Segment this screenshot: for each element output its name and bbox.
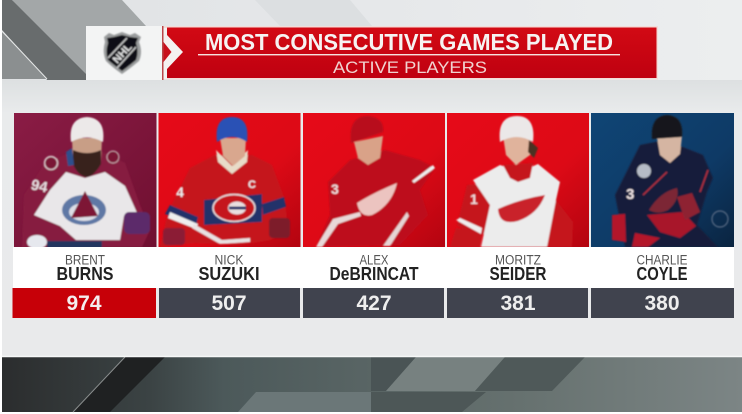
player photo: Suzuki: 4 bbox=[176, 184, 184, 200]
panel: Alex DeBrincat bbox=[303, 113, 445, 284]
bottom background bbox=[2, 356, 742, 412]
NHL logo box bbox=[86, 26, 162, 80]
player photo: Coyle bbox=[591, 113, 734, 247]
last name: SUZUKI bbox=[198, 264, 260, 284]
panel: Nick Suzuki bbox=[158, 113, 300, 284]
value: 974: 974 bbox=[66, 292, 102, 315]
main panel background bbox=[2, 80, 742, 356]
icon: white chevron bbox=[164, 28, 183, 79]
last name: SEIDER bbox=[490, 264, 546, 284]
player photo: Seider bbox=[447, 113, 589, 247]
player photo: Burns: 94 bbox=[29, 176, 50, 197]
icon: NHL shield: NHL bbox=[111, 41, 135, 66]
last name: COYLE bbox=[636, 264, 688, 284]
subheading: ACTIVE PLAYERS bbox=[333, 59, 487, 77]
first name: NICK bbox=[214, 252, 244, 268]
value: 974 bbox=[12, 288, 156, 318]
value: 381 bbox=[447, 288, 588, 318]
panel: Moritz Seider bbox=[447, 113, 589, 284]
player photo: DeBrincat bbox=[303, 113, 445, 247]
player photo: Suzuki bbox=[158, 113, 300, 247]
first name: ALEX bbox=[360, 252, 388, 268]
value: 380: 380 bbox=[644, 292, 680, 315]
top background bbox=[2, 0, 742, 80]
first name: CHARLIE bbox=[636, 252, 688, 268]
player photo: Coyle: 3 bbox=[626, 186, 634, 203]
panel: Brent Burns bbox=[14, 113, 156, 284]
player photo: Burns bbox=[14, 113, 156, 249]
last name: BURNS bbox=[56, 264, 114, 284]
player photo: DeBrincat: 3 bbox=[331, 181, 339, 197]
value: 381: 381 bbox=[500, 292, 536, 315]
last name: DeBRINCAT bbox=[330, 264, 418, 284]
name strip background bbox=[13, 247, 734, 288]
panel: Charlie Coyle bbox=[591, 113, 734, 284]
value: 427: 427 bbox=[356, 292, 392, 315]
value: 380 bbox=[591, 288, 734, 318]
title banner bbox=[162, 26, 658, 80]
value: 427 bbox=[303, 288, 444, 318]
first name: BRENT bbox=[65, 252, 105, 268]
player photo: Seider: 1 bbox=[470, 191, 478, 207]
first name: MORITZ bbox=[495, 252, 541, 268]
player photo: Suzuki: C bbox=[248, 179, 256, 191]
value: 507 bbox=[159, 288, 300, 318]
value: 507: 507 bbox=[211, 292, 247, 315]
heading: MOST CONSECUTIVE GAMES PLAYED bbox=[205, 29, 613, 55]
